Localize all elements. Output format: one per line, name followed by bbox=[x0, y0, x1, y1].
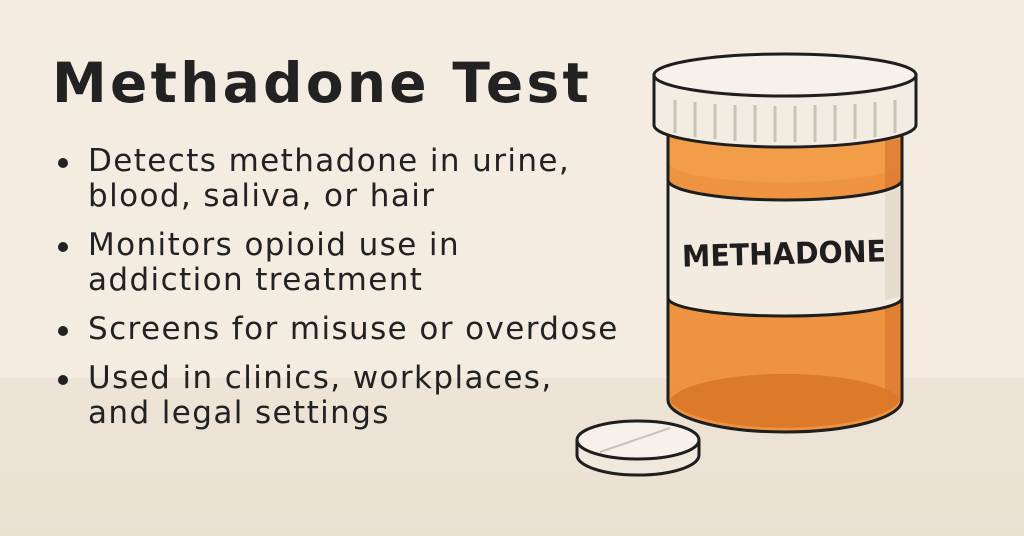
bullet list: Used in clinics, workplaces, bbox=[88, 360, 553, 396]
bullet list: Monitors opioid use in bbox=[88, 227, 460, 263]
bottle body bbox=[654, 54, 916, 432]
bullet list: blood, saliva, or hair bbox=[88, 178, 435, 214]
title: Methadone Test bbox=[52, 51, 592, 115]
label bbox=[668, 180, 902, 316]
pill bbox=[577, 421, 699, 475]
bullet list: addiction treatment bbox=[88, 262, 423, 298]
bullet list: Screens for misuse or overdose bbox=[88, 311, 619, 347]
cap bbox=[654, 75, 916, 147]
bullet list: Detects methadone in urine, bbox=[88, 143, 570, 179]
bullet list bbox=[58, 143, 619, 431]
label text: METHADONE bbox=[682, 234, 886, 275]
bullet list: and legal settings bbox=[88, 395, 390, 431]
